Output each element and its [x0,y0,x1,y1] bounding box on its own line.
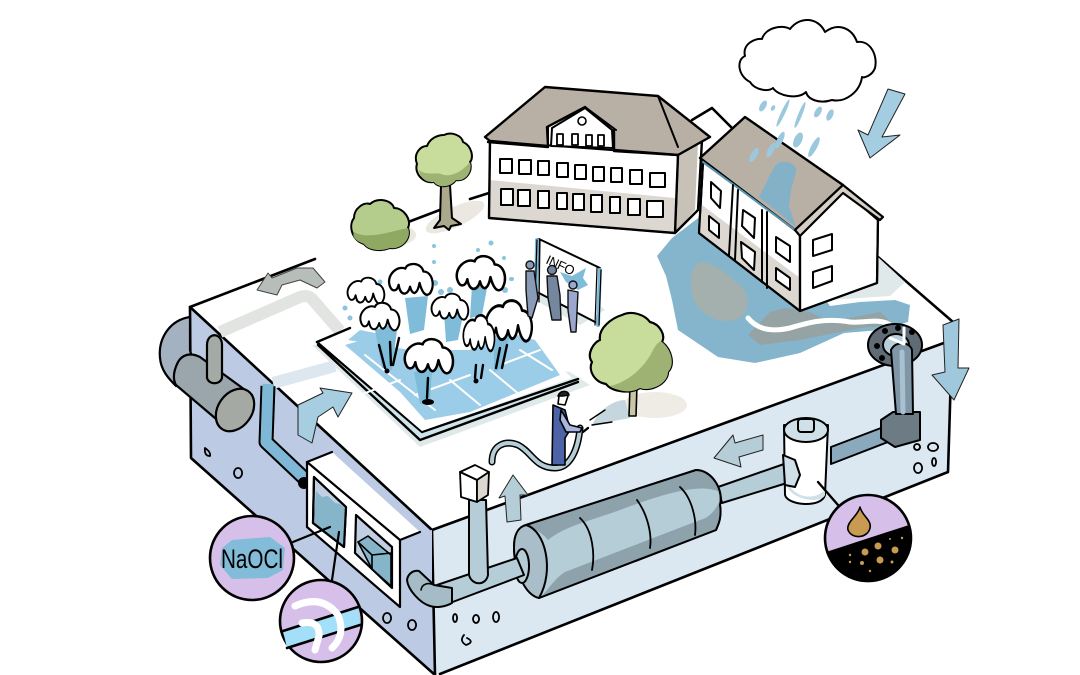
water flood puddle [657,212,910,363]
arrow: grey curved arrow [257,268,325,295]
sign text: INFO [544,252,577,278]
pipe: grey outlet pipe on left [160,317,262,439]
window: chlorine tank [313,477,346,547]
pipe elbow and filter feed [831,412,920,464]
tree: bush [351,200,416,250]
person 2 [547,266,561,320]
arrow: left flow arrow [714,435,763,467]
tree: upper small tree [416,134,488,240]
fountain square platform [312,303,590,447]
pipe: blue pipe into dosing box [266,384,310,489]
pipe between filter and tank [718,463,787,503]
callout: pipe with injection [280,580,362,662]
person 1 [526,261,538,318]
windows lower [501,189,663,217]
filter vessel [783,418,828,504]
panel: dosing box [307,452,432,607]
main building [485,87,710,233]
callout: NaOCl [210,516,339,600]
pipe: faded blue pipe on top surface [273,366,335,383]
fountains [342,240,532,405]
panel: top surface edges [190,108,953,530]
callout: oil and sediment [818,482,911,582]
info board with people [526,239,605,332]
arrow: blue down arrow on right face [932,319,969,400]
panel: left face of block [190,307,435,675]
tank [514,470,721,598]
flange and vertical drain pipe [868,324,922,414]
person with hose [552,391,588,465]
arrow: up arrow [499,475,528,522]
vertical pipe to hose box [469,500,488,583]
windows upper [500,159,665,187]
cloud [739,20,876,102]
hydrant box [460,465,489,502]
tree: lower large tree [590,313,687,425]
roof [700,117,843,230]
roof [485,87,710,155]
vertical posts [729,185,767,288]
windows [709,182,832,290]
house on the right [699,117,883,311]
roof wet stain [759,162,796,227]
arrow: blue down-left arrow from sky [858,89,905,158]
person 3 [568,281,578,332]
rain [748,99,835,163]
pipe: faded grey pipe on top surface [220,296,340,332]
hose [492,428,580,468]
panel: right face of block [432,340,952,675]
gable [551,108,613,148]
window: pump room [355,515,392,588]
arrow: blue curved arrow [298,388,352,443]
bottom pipe with elbow [407,558,524,607]
callout: NaOCl: NaOCl [221,544,283,574]
